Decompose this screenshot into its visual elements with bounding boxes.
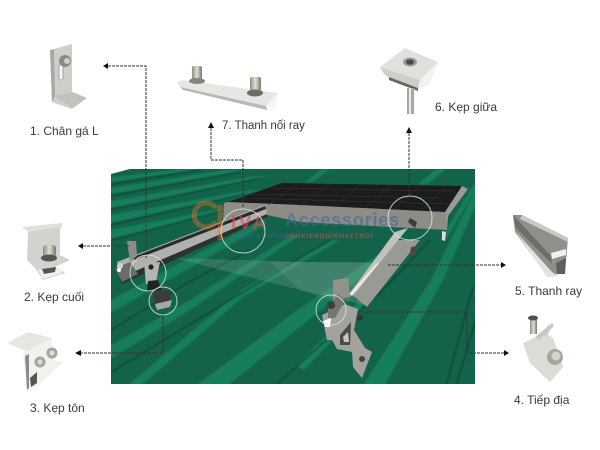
label: 1. Chân gá L: 1. Chân gá L	[30, 124, 99, 138]
label: 5. Thanh ray: 5. Thanh ray	[515, 284, 582, 298]
solar module	[223, 183, 468, 241]
label: 2. Kẹp cuối: 2. Kẹp cuối	[24, 290, 84, 304]
arrow: 2 to end clamp	[78, 243, 129, 249]
icon: mid clamp	[380, 48, 438, 114]
roof clamp	[152, 290, 171, 305]
panel: green metal roof with mounting system	[105, 169, 480, 390]
watermark logo: PHUKIENDIENMATTROI	[285, 233, 373, 240]
icon: grounding clip	[523, 316, 563, 382]
L bracket	[144, 262, 160, 284]
label: 4. Tiếp địa: 4. Tiếp địa	[514, 393, 570, 407]
side rail	[322, 218, 420, 378]
watermark logo: NĂNG LƯỢNG	[232, 231, 286, 240]
icon: rail connector	[177, 66, 278, 110]
front rail	[115, 205, 268, 310]
icon: end clamp	[22, 223, 70, 280]
icon: L bracket	[50, 44, 87, 109]
arrow: 4 to grounding clip	[362, 312, 509, 356]
watermark logo: Accessories	[285, 210, 400, 230]
arrow: 5 to rail	[388, 262, 506, 268]
callout circles	[130, 196, 432, 325]
assembly foot	[322, 304, 372, 378]
icon: rail profile	[513, 215, 568, 277]
arrow: 1 to L bracket	[103, 63, 146, 258]
arrow: 3 to roof clamp	[75, 315, 163, 356]
label: 7. Thanh nối ray: 7. Thanh nối ray	[222, 120, 305, 132]
far roof ribs	[105, 169, 480, 390]
watermark logo	[194, 203, 400, 240]
icon: roof clamp	[7, 332, 63, 390]
label: 3. Kẹp tôn: 3. Kẹp tôn	[30, 401, 85, 415]
label: 6. Kẹp giữa: 6. Kẹp giữa	[435, 100, 497, 114]
arrow: 6 to mid clamp	[406, 127, 412, 195]
watermark logo: IVA	[231, 213, 269, 234]
translucent light beams	[175, 258, 390, 305]
arrow: 7 to rail connector	[208, 122, 243, 207]
